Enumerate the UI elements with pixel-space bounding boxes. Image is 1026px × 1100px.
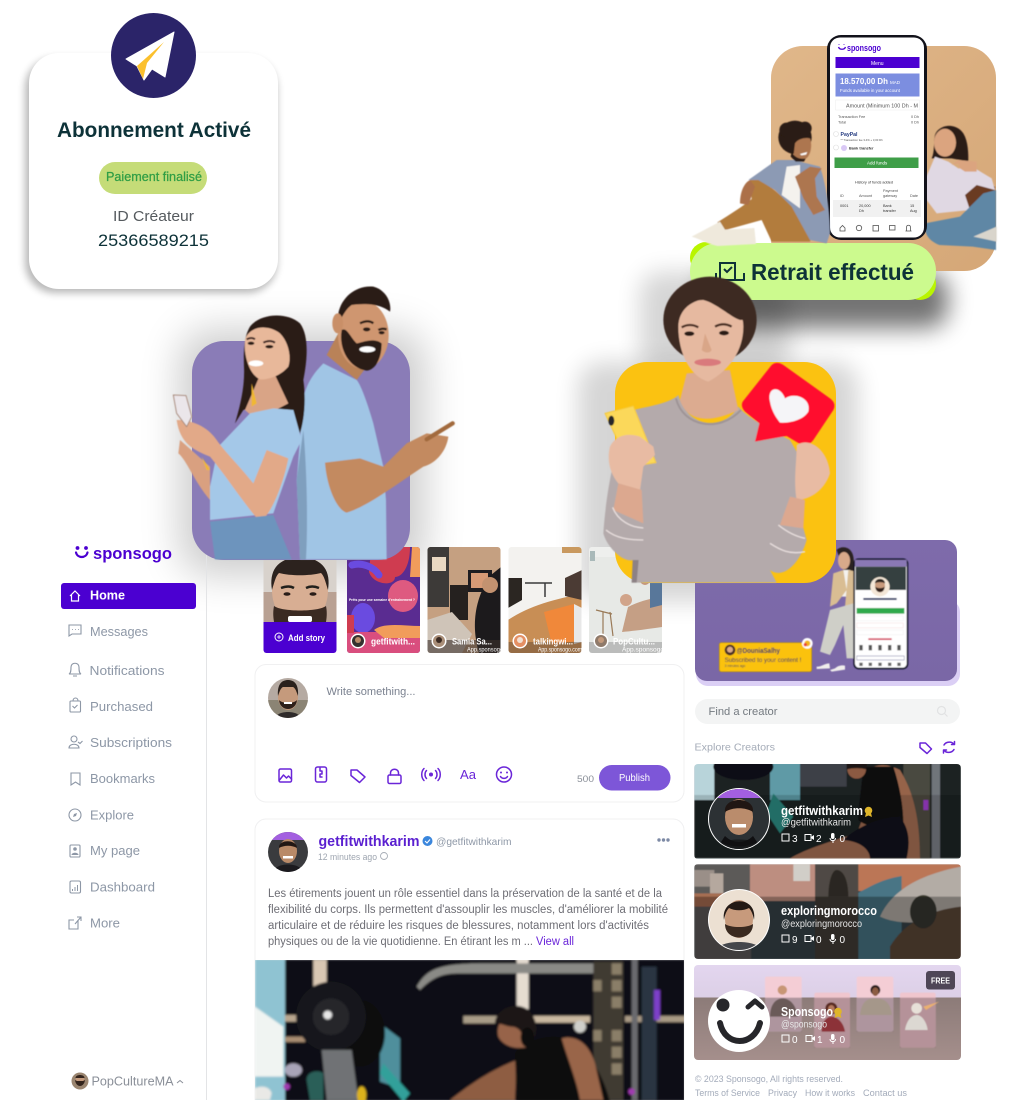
couple shadow	[180, 330, 425, 575]
phone funds table: History of funds added	[855, 180, 893, 184]
post time: 12 minutes ago	[318, 852, 377, 863]
phone fees: Total	[838, 120, 846, 124]
phone payment options: PayPal	[840, 132, 858, 138]
story: Samia	[427, 547, 503, 654]
story: getfitwith	[347, 547, 420, 653]
icon: refresh	[944, 742, 954, 753]
phone bottom nav icons	[840, 225, 911, 231]
nav item: subscriptions: Subscriptions	[90, 735, 173, 750]
card 1 avatar	[708, 788, 770, 850]
banner person	[817, 547, 857, 672]
story: add story	[264, 560, 336, 653]
card 3 mini cards	[765, 977, 939, 1048]
card 3 avatar: smiley logo	[708, 990, 770, 1052]
nav item: notifications: Notifications	[90, 663, 165, 678]
phone payment options: ** Transaction fee 3.4% + 3,00 Dh	[840, 138, 883, 142]
icon: tag	[920, 743, 932, 754]
card 1 labels: 3	[792, 834, 798, 845]
search icon	[938, 706, 948, 716]
post text	[268, 888, 668, 948]
phone balance: 18.570,00 Dh	[840, 76, 888, 86]
composer panel	[255, 664, 684, 802]
phone add funds button: Add funds	[867, 160, 888, 166]
composer toolbar icons	[279, 767, 512, 784]
card 3 labels: @sponsogo	[781, 1020, 827, 1030]
sidebar	[61, 544, 207, 1100]
phone header logo: sponsogo	[847, 43, 881, 53]
icon: gold badge	[834, 1008, 842, 1018]
story: PopCultu	[589, 547, 664, 654]
phone header logo	[838, 43, 881, 53]
nav item: explore	[69, 808, 134, 822]
banner note: 3 minutes ago	[725, 664, 745, 668]
withdrawal scene	[690, 35, 997, 328]
phone funds table: Dh	[859, 209, 864, 213]
banner background	[695, 540, 957, 681]
pill: Retrait effectué	[751, 259, 914, 285]
footer: © 2023 Sponsogo, All rights reserved.	[695, 1074, 843, 1084]
explore creators header: Explore Creators	[694, 742, 775, 754]
phone add funds button	[834, 158, 918, 168]
publish button	[599, 765, 670, 790]
card 1 photo	[694, 753, 961, 858]
subscription title: Abonnement Activé	[57, 119, 251, 142]
phone balance: Funds available in your account	[840, 88, 901, 93]
pill	[690, 242, 936, 300]
phone amount input: Amount (Minimum 100 Dh - M	[846, 104, 918, 110]
banner note	[719, 638, 813, 672]
payment status pill	[99, 162, 207, 194]
card 3 background	[694, 965, 961, 1060]
nav item: bookmarks: Bookmarks	[90, 771, 155, 786]
card 1 labels: @getfitwithkarim	[781, 818, 851, 828]
post text: articulaire et de réduire les risques de blessures, notamment lors d'activités	[268, 920, 649, 932]
phone balance	[836, 74, 920, 96]
card 3 labels: 1	[817, 1035, 823, 1046]
phone funds table	[833, 180, 921, 217]
icon: paper plane badge	[111, 13, 196, 98]
user profile menu	[72, 1072, 184, 1090]
story: getfitwith: Prêts pour une semaine d'entraînement ?	[349, 598, 415, 602]
phone funds table: ID	[840, 194, 844, 198]
story: Samia: App.sponsogo	[467, 646, 503, 654]
FREE tag: FREE	[931, 976, 950, 986]
withdrawal pill shadow	[702, 272, 948, 328]
couple figures	[173, 287, 453, 559]
card 1 labels: 2	[816, 834, 822, 845]
card 3 labels: 0	[792, 1035, 798, 1046]
post text: physiques ou de la vie quotidienne. En étirant les m ...	[268, 936, 533, 948]
explore creators header	[694, 742, 954, 754]
phone fees	[838, 115, 919, 124]
card 2 labels: exploringmorocco	[781, 904, 877, 918]
phone balance: MAD	[890, 80, 901, 85]
man	[297, 287, 453, 559]
story: getfitwith: getfitwith...	[371, 636, 415, 648]
phone funds table: Payment	[883, 189, 899, 193]
footer: Terms of Service	[695, 1088, 760, 1098]
phone funds table: Amount	[859, 194, 873, 198]
sidebar divider	[206, 548, 207, 1100]
banner figure and phone	[719, 547, 908, 672]
nav item: my page: My page	[90, 843, 140, 858]
purple background	[192, 341, 410, 560]
post author name: getfitwithkarim	[318, 834, 420, 850]
nav item: purchased: Purchased	[90, 699, 153, 714]
user profile menu: PopCultureMA	[92, 1074, 174, 1088]
phone funds table: gateway	[883, 194, 897, 198]
story: talkingwi: talkingwi...	[533, 636, 573, 648]
phone funds table: 0001	[840, 204, 848, 208]
card 1 labels: getfitwithkarim	[781, 804, 863, 818]
woman with heart scene	[603, 277, 836, 583]
woman scene shadow	[578, 362, 858, 602]
banner note: @DouniaSalhy	[737, 646, 781, 655]
tan background	[771, 46, 996, 271]
icon: gold badge	[865, 807, 872, 817]
phone menu bar	[836, 57, 920, 68]
story: Samia: Samia Sa...	[452, 636, 492, 648]
card 2 labels	[781, 904, 877, 946]
creator card: exploringmorocco	[694, 864, 961, 959]
banner phone	[853, 558, 908, 669]
phone funds table: 20,000	[859, 204, 871, 208]
banner shadow	[696, 600, 960, 686]
nav item: more: More	[90, 916, 120, 930]
footer: Contact us	[863, 1088, 908, 1098]
nav item: home	[61, 583, 196, 609]
nav item: home: Home	[90, 588, 125, 602]
couple scene	[173, 287, 453, 560]
nav item: dashboard: Dashboard	[90, 880, 155, 894]
post menu dots	[657, 838, 670, 842]
woman	[173, 316, 307, 559]
story: PopCultu: App.sponsogo	[622, 646, 664, 654]
composer card	[255, 664, 684, 802]
composer toolbar icons: Aa	[460, 768, 476, 782]
phone payment options: Bank transfer	[849, 146, 874, 150]
subscription card	[25, 13, 278, 293]
stories row	[263, 547, 664, 654]
story: talkingwi: App.sponsogo.com	[538, 646, 582, 654]
yellow background	[615, 362, 836, 583]
story: add story: Add story	[288, 633, 325, 643]
promo banner	[695, 540, 960, 686]
creator id value: 25366589215	[98, 231, 209, 250]
story: PopCultu: PopCultu...	[613, 636, 655, 648]
subscription card panel	[29, 53, 278, 289]
footer: How it works	[805, 1088, 855, 1098]
post panel	[255, 819, 684, 1100]
phone fees: Transaction Fee	[838, 115, 865, 119]
composer avatar	[268, 678, 308, 718]
card 1 labels	[781, 804, 872, 845]
phone funds table: Date	[910, 194, 918, 198]
card 3 labels	[781, 1005, 846, 1046]
woman figure	[603, 277, 834, 583]
post gym photo	[255, 959, 685, 1100]
post text: Les étirements jouent un rôle essentiel dans la préservation de la santé et de la	[268, 888, 663, 900]
nav item: messages: Messages	[90, 624, 148, 639]
phone	[827, 35, 927, 240]
verified badge	[422, 836, 432, 846]
card 2 labels: @exploringmorocco	[781, 919, 862, 930]
phone funds table: Aug	[910, 209, 917, 213]
icon: ballot check	[716, 263, 744, 280]
FREE tag	[926, 971, 955, 990]
creator card: Sponsogo	[694, 965, 961, 1060]
nav item: more	[69, 916, 120, 930]
phone funds table: Bank	[883, 204, 892, 208]
card 3 labels: Sponsogo	[781, 1005, 833, 1019]
footer: Privacy	[768, 1088, 797, 1098]
woman head shadow	[640, 272, 790, 372]
post author handle: @getfitwithkarim	[436, 836, 512, 848]
search box: Find a creator	[708, 706, 778, 718]
post avatar	[268, 832, 308, 872]
brand logo: sponsogo	[93, 544, 172, 563]
nav item: explore: Explore	[90, 808, 134, 822]
creator id label: ID Créateur	[113, 208, 194, 225]
card 1 labels: 0	[840, 834, 846, 845]
phone funds table: transfer	[883, 209, 897, 213]
post text: View all	[536, 936, 574, 948]
search box	[695, 699, 960, 724]
post text: flexibilité du corps. Ils permettent d'assouplir les muscles, d'améliorer la mobilité	[268, 904, 668, 916]
phone amount input	[836, 100, 920, 110]
card 3 labels: 0	[840, 1035, 846, 1046]
card 2 avatar	[708, 889, 770, 951]
story: talkingwi	[508, 547, 582, 654]
card 2 labels: 9	[792, 935, 798, 946]
subscription card shadow	[25, 58, 277, 293]
seated woman	[925, 126, 997, 250]
phone fees: 0 Dh	[911, 120, 919, 124]
publish button: Publish	[619, 773, 650, 784]
seated man	[692, 121, 830, 246]
card 2 labels: 0	[816, 935, 822, 946]
creator card: getfitwithkarim	[694, 753, 961, 858]
post card	[255, 819, 685, 1100]
footer	[695, 1074, 908, 1098]
payment status pill: Paiement finalisé	[106, 170, 202, 184]
character count: 500	[577, 774, 594, 785]
phone fees: 0 Dh	[911, 115, 919, 119]
phone menu bar: Menu	[871, 61, 884, 67]
phone payment options	[834, 132, 883, 151]
phone funds table: 15	[910, 204, 914, 208]
card 2 labels: 0	[840, 935, 846, 946]
card 2 photo	[694, 864, 961, 959]
banner note: Subscribed to your content !	[725, 657, 802, 664]
composer placeholder: Write something...	[326, 686, 416, 698]
